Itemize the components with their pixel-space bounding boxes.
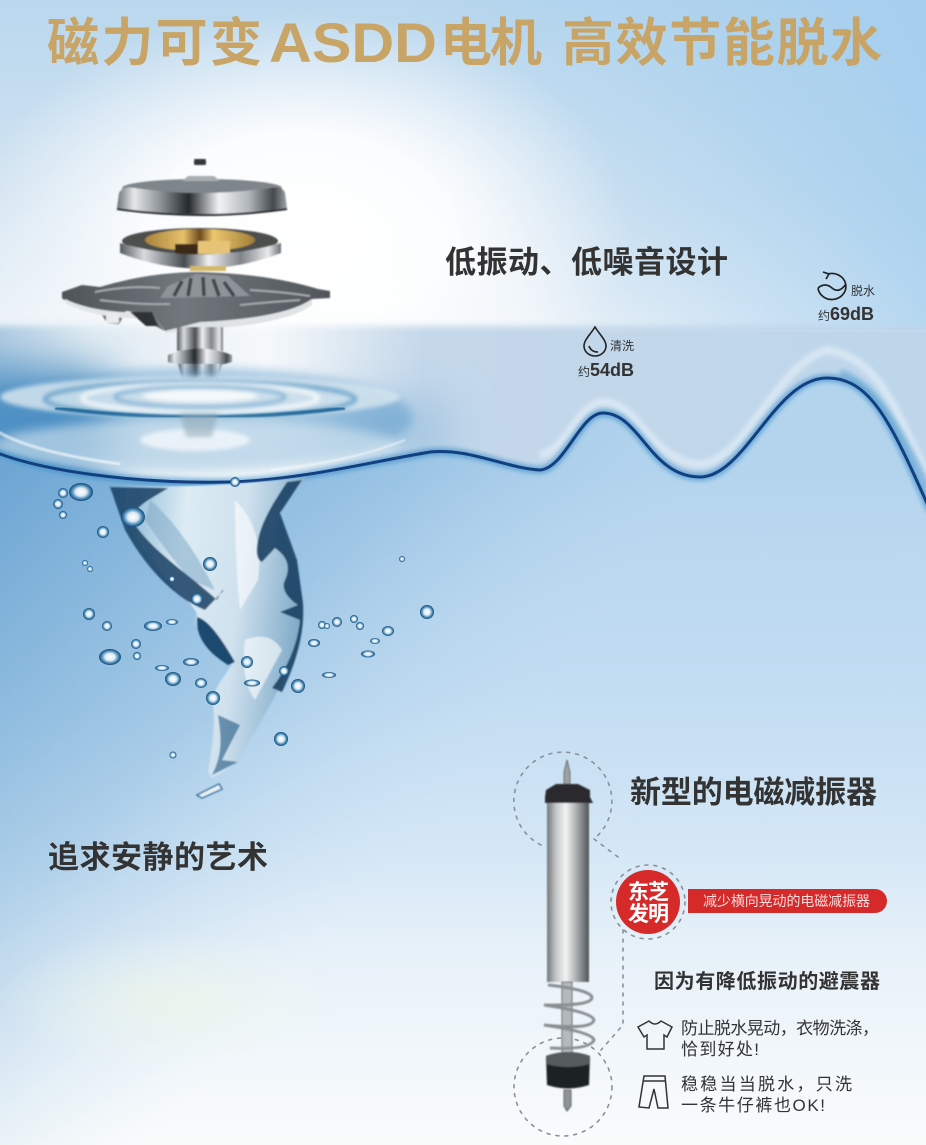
damper: cylinder bbox=[547, 803, 589, 982]
badge: Toshiba invention bbox=[616, 870, 680, 934]
icon: t-shirt bbox=[638, 1021, 672, 1049]
red label bar bbox=[688, 889, 887, 913]
wash noise label: 约54dB bbox=[578, 360, 634, 380]
motor: base plate bbox=[62, 272, 330, 333]
wave surface line bbox=[0, 350, 926, 510]
benefit: jeans: 稳稳当当脱水，只洗 bbox=[681, 1075, 852, 1094]
benefit: laundry bbox=[638, 1019, 879, 1059]
title: 高效节能脱水 bbox=[562, 15, 882, 73]
red label bar: 减少横向晃动的电磁减振器 bbox=[703, 893, 870, 909]
dashed callout circles and connector bbox=[514, 752, 685, 1136]
benefit: laundry: 恰到好处! bbox=[681, 1040, 759, 1059]
benefit: jeans: 一条牛仔裤也OK! bbox=[681, 1096, 825, 1115]
title bbox=[47, 11, 882, 74]
motor assembly bbox=[62, 159, 330, 379]
spin noise label: 脱水 bbox=[851, 283, 875, 298]
damper: spring bbox=[544, 982, 594, 1054]
icon: spin cycle bbox=[818, 272, 846, 299]
benefit: laundry: 防止脱水晃动，衣物洗涤， bbox=[681, 1019, 879, 1038]
wash noise label: 清洗 bbox=[610, 339, 634, 353]
heading: new electromagnetic damper: 新型的电磁减振器 bbox=[630, 775, 877, 810]
background: sky and water bbox=[0, 0, 926, 536]
heading: low vibration low noise: 低振动、低噪音设计 bbox=[445, 245, 728, 280]
icon: water drop bbox=[584, 327, 606, 356]
motor: rotor cover bbox=[117, 176, 287, 216]
damper: top pin bbox=[564, 760, 570, 784]
motor: shaft bbox=[168, 327, 232, 379]
heading: pursuit of quiet: 追求安静的艺术 bbox=[48, 840, 268, 875]
motor: stator with gold coil bbox=[120, 228, 281, 271]
damper: bottom cap bbox=[546, 1052, 590, 1088]
water tornado bbox=[107, 477, 307, 798]
damper: bottom pin bbox=[564, 1090, 571, 1111]
spin noise label: 约69dB bbox=[818, 304, 874, 324]
damper: top cap bbox=[545, 784, 593, 803]
icon: trousers bbox=[639, 1076, 668, 1108]
electromagnetic damper bbox=[544, 760, 594, 1111]
wash noise label bbox=[578, 327, 634, 380]
spin noise label bbox=[818, 272, 875, 324]
title: 磁力可变 bbox=[47, 15, 262, 73]
water ripples under the motor bbox=[0, 368, 413, 472]
badge: Toshiba invention: 东芝 bbox=[628, 880, 669, 904]
title: 电机 bbox=[440, 15, 542, 73]
motor: top knob bbox=[194, 159, 206, 165]
water bubbles bbox=[53, 477, 434, 758]
water body below the surface line bbox=[0, 378, 926, 1145]
title: ASDD bbox=[269, 11, 437, 74]
subheading: damper benefit: 因为有降低振动的避震器 bbox=[654, 970, 880, 993]
badge: Toshiba invention: 发明 bbox=[628, 903, 669, 926]
benefit: jeans bbox=[639, 1075, 852, 1115]
